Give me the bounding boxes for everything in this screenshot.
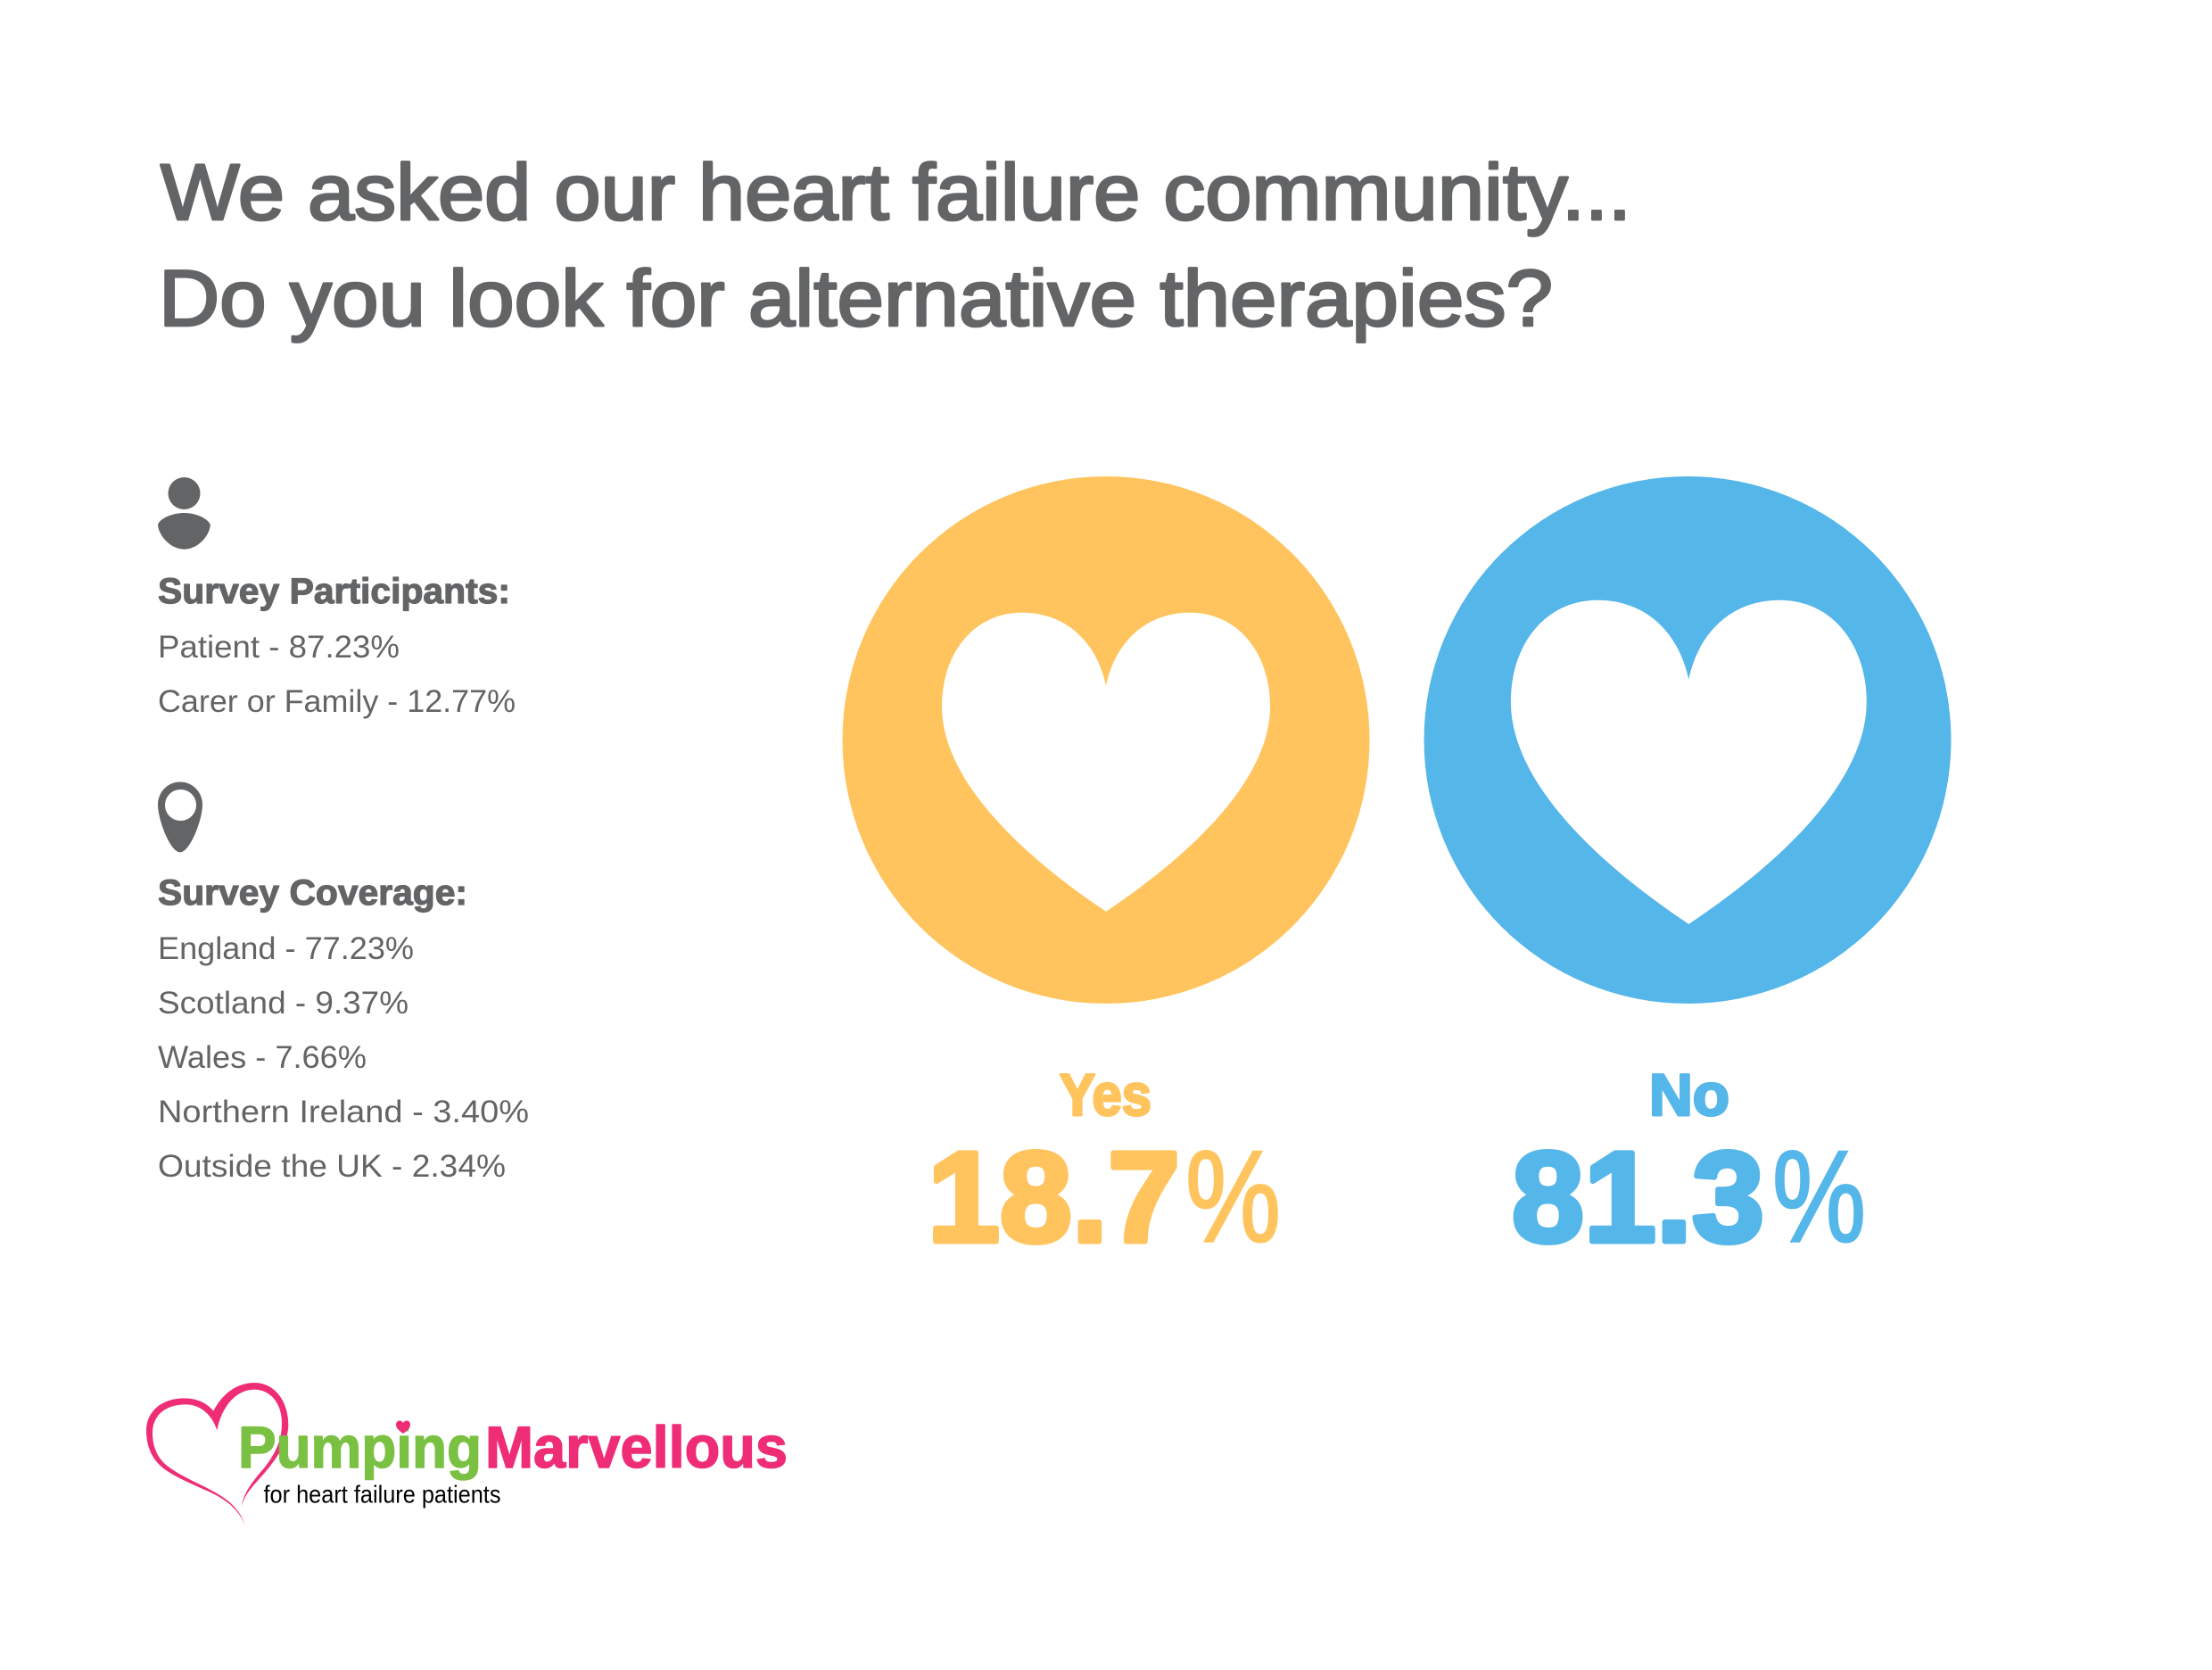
heading: survey coverage: Survey Coverage: <box>158 873 467 913</box>
coverage list: England - 77.23% <box>158 930 414 966</box>
value: 18.7%: 18.7 <box>928 1126 1180 1269</box>
heading: survey participants: Survey Participants: <box>158 572 510 611</box>
logo wordmark: Pumping: Pumping <box>238 1414 482 1480</box>
participants list: Patient - 87.23% <box>158 629 400 665</box>
icon: person <box>158 477 210 550</box>
panel: survey participants <box>158 477 516 719</box>
title: Do you look for alternative therapies? <box>159 253 1553 343</box>
panel: survey coverage <box>158 781 529 1184</box>
blue circle with heart <box>1424 476 1952 1004</box>
value: 18.7%: % <box>1185 1124 1281 1269</box>
label: yes: Yes <box>1060 1062 1151 1128</box>
logo small heart <box>396 1421 410 1434</box>
participants list <box>158 629 516 719</box>
title: We asked our heart failure community... <box>161 147 1631 236</box>
coverage list: Northern Ireland - 3.40% <box>158 1094 529 1129</box>
yellow circle with heart <box>842 476 1370 1004</box>
value: 81.3%: % <box>1772 1124 1866 1269</box>
logo wordmark: Marvellous: Marvellous <box>485 1414 788 1480</box>
value: 18.7% <box>928 1124 1281 1269</box>
panel: no result <box>1424 476 1952 1269</box>
panel: yes result <box>842 476 1370 1269</box>
logo: Pumping Marvellous <box>146 1383 788 1525</box>
participants list: Carer or Family - 12.77% <box>158 683 516 719</box>
coverage list <box>158 930 529 1184</box>
logo tagline: for heart failure patients <box>264 1481 501 1508</box>
coverage list: Wales - 7.66% <box>158 1039 367 1075</box>
value: 81.3% <box>1512 1124 1866 1269</box>
label: no: No <box>1649 1062 1729 1128</box>
coverage list: Outside the UK - 2.34% <box>158 1148 506 1184</box>
icon: location pin <box>158 781 202 852</box>
title <box>159 147 1631 343</box>
value: 81.3%: 81.3 <box>1512 1126 1764 1269</box>
logo heart outline <box>146 1383 288 1525</box>
coverage list: Scotland - 9.37% <box>158 985 409 1021</box>
